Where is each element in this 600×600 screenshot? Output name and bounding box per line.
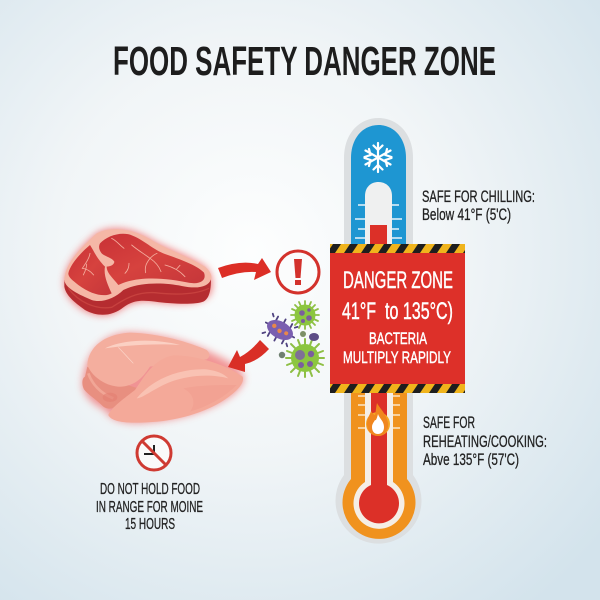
small spores [300,331,306,337]
purple bacterium [260,312,300,348]
chicken back breast [87,333,209,387]
illustration: raw chicken [82,333,244,423]
text: holding warning: IN RANGE FOR MOINE [96,499,203,516]
text: safe for reheating: Abve 135°F (57'C) [423,450,519,469]
text: safe for reheating: SAFE FOR [423,413,475,432]
panel: danger zone: BACTERIA [369,329,427,348]
icon: snowflake [364,143,392,172]
text: safe for chilling: SAFE FOR CHILLING: [422,187,535,206]
panel: danger zone: DANGER ZONE [343,267,453,294]
green bacterium, large [286,339,324,377]
text: holding warning: 15 HOURS [125,516,175,533]
chicken underside [82,367,138,409]
icons: bacteria [260,301,324,377]
chicken front breast [108,355,243,423]
icon: flame [366,403,390,436]
thermometer [336,118,422,544]
text: safe for chilling: Below 41°F (5'C) [422,205,511,224]
text: safe for reheating [423,413,547,469]
upper thermometer: cold section [344,118,413,250]
lower thermometer: hot section [336,390,422,544]
panel: danger zone [330,244,465,393]
text: holding warning [96,481,203,533]
illustration: raw steak [64,229,212,315]
arrow: steak to alert [218,258,271,280]
green bacterium, top [291,301,319,329]
panel: danger zone: 41°F to 135°C) [342,298,453,325]
icon: no clock [137,436,171,470]
arrow: bacteria to chicken [228,340,269,372]
text: holding warning: DO NOT HOLD FOOD [100,481,200,498]
text: safe for chilling [422,187,535,224]
panel: danger zone: MULTIPLY RAPIDLY [343,348,451,367]
icon: alert circle [277,251,319,293]
